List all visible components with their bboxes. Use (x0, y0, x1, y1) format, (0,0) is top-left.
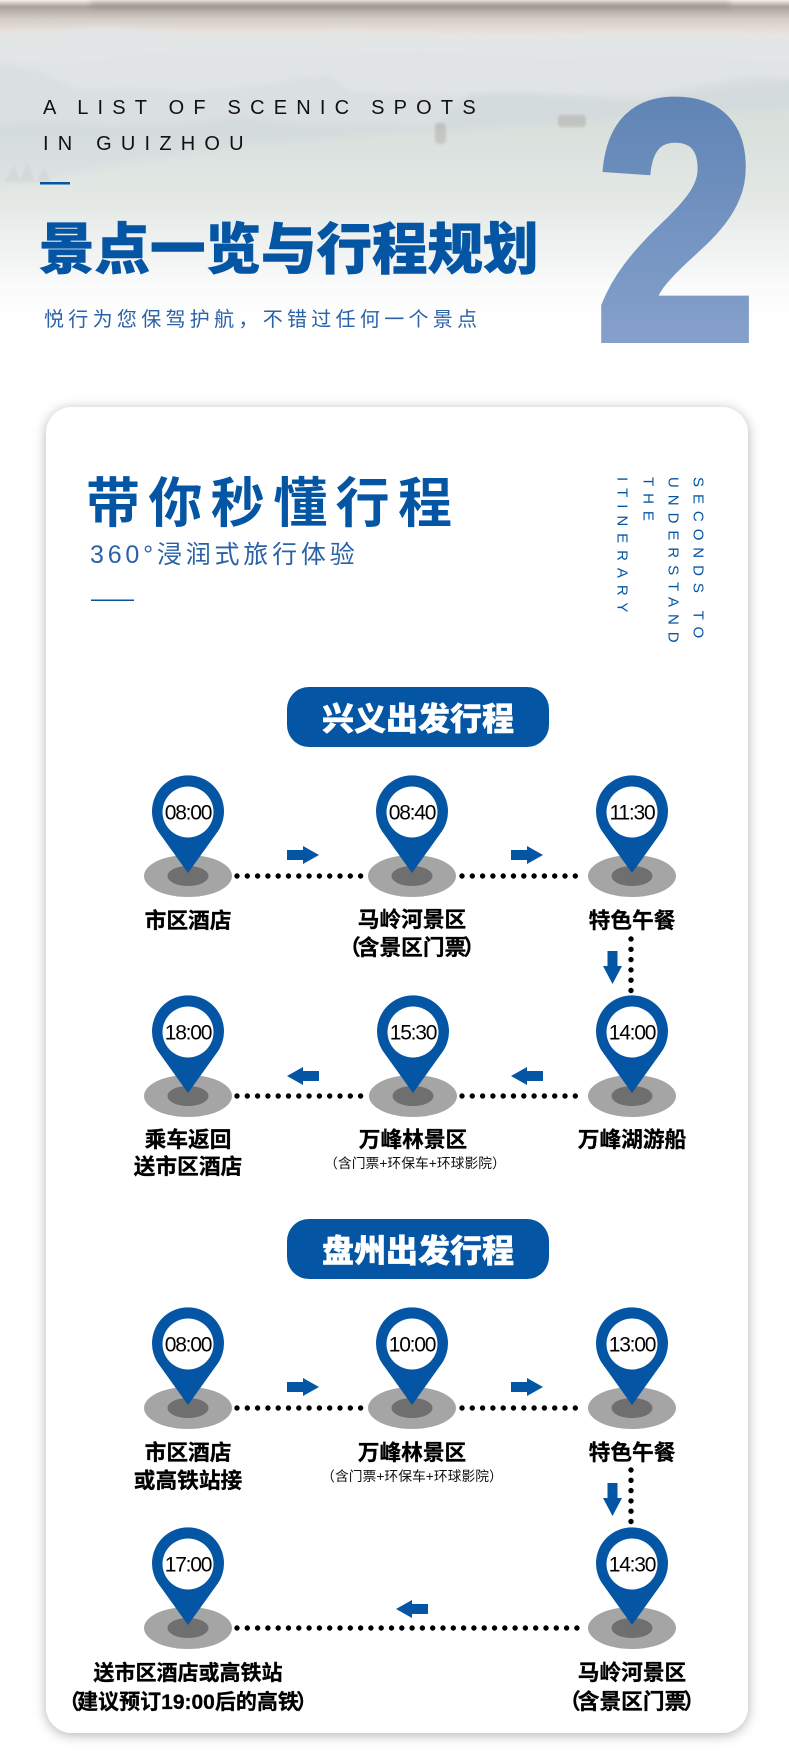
stop 17:00: 建议预订19:00后的高铁 (77, 1690, 299, 1714)
stop 13:00: 13:00 (609, 1334, 656, 1356)
arrow right (511, 846, 543, 864)
stop 08:00 (144, 775, 232, 933)
stop 10:00 (321, 1307, 503, 1484)
arrow down (603, 951, 622, 984)
route connector down (628, 1470, 634, 1522)
stop 14:30: （ (559, 1689, 581, 1714)
card accent line (91, 600, 134, 601)
arrow right (287, 846, 319, 864)
stop 11:30 (588, 775, 676, 933)
pill heading: xingyi route: 兴义出发行程 (322, 701, 514, 737)
stop 18:00: 送市区酒店 (134, 1154, 242, 1179)
route connector down (628, 939, 634, 992)
arrow right (511, 1378, 543, 1396)
route connector row 4 (237, 1625, 578, 1631)
arrow down (603, 1483, 622, 1516)
stop 17:00: 送市区酒店或高铁站 (94, 1661, 282, 1685)
stop 08:00: 08:00 (165, 1334, 212, 1356)
main title: 景点一览与行程规划 (39, 219, 539, 281)
stop 15:30 (324, 995, 506, 1171)
english heading: A LIST OF SCENIC SPOTS (43, 97, 485, 119)
stop 15:30: 万峰林景区 (359, 1127, 467, 1152)
stop 13:00 (588, 1307, 676, 1465)
stop 08:40 (339, 775, 485, 960)
stop 14:30: 马岭河景区 (578, 1660, 686, 1685)
vertical english caption: UNDERSTAND (664, 477, 682, 650)
pill heading: xingyi route (287, 687, 549, 747)
route connectors row 2 (237, 1093, 578, 1099)
stop 11:30: 特色午餐 (589, 908, 676, 933)
stop 13:00: 特色午餐 (589, 1440, 676, 1465)
background: misty mountain landscape (0, 0, 789, 345)
stop 10:00: （含门票+环保车+环球影院） (321, 1468, 503, 1484)
pill heading: panzhou route (287, 1219, 549, 1279)
stop 11:30: 11:30 (610, 802, 655, 824)
stop 15:30: （含门票+环保车+环球影院） (324, 1155, 506, 1171)
stop 08:00: 08:00 (165, 802, 212, 824)
stop 08:00 (134, 1307, 243, 1493)
english heading (43, 97, 485, 155)
vertical english caption: ITINERARY (614, 477, 630, 619)
vertical english caption: THE (640, 477, 656, 528)
arrow left (511, 1067, 543, 1085)
pill heading: panzhou route: 盘州出发行程 (322, 1233, 514, 1269)
stop 18:00: 乘车返回 (145, 1127, 231, 1152)
english heading: IN GUIZHOU (43, 133, 253, 155)
stop 08:40: ） (463, 935, 485, 960)
card subtitle: 360°浸润式旅行体验 (90, 541, 359, 569)
panel: itinerary card (46, 407, 748, 1733)
arrow left (287, 1067, 319, 1085)
stop 14:30: ） (683, 1689, 705, 1714)
stop 14:30: 14:30 (609, 1554, 656, 1576)
stop 17:00 (59, 1527, 317, 1714)
stop 18:00: 18:00 (165, 1022, 212, 1044)
stop 10:00: 万峰林景区 (358, 1440, 466, 1465)
stop 08:00: 市区酒店 (145, 908, 231, 933)
stop 18:00 (134, 995, 242, 1179)
stop 14:00 (578, 995, 687, 1152)
arrow left (396, 1600, 428, 1618)
stop 15:30: 15:30 (390, 1022, 437, 1044)
card title: 带你秒懂行程 (86, 474, 460, 534)
stop 14:00: 万峰湖游船 (578, 1127, 687, 1152)
stop 08:40: 含景区门票 (358, 935, 466, 960)
stop 08:40: （ (339, 935, 361, 960)
stop 08:00: 市区酒店 (145, 1440, 231, 1465)
arrow right (287, 1378, 319, 1396)
route connectors row 1 (237, 873, 578, 879)
vertical english caption (614, 477, 706, 650)
stop 14:30: 含景区门票 (578, 1689, 686, 1714)
stop 17:00: ） (296, 1691, 317, 1714)
stop 17:00: 17:00 (165, 1554, 212, 1576)
stop 08:40: 08:40 (389, 802, 436, 824)
subtitle: 悦行为您保驾护航，不错过任何一个景点 (44, 308, 481, 331)
stop 14:30 (559, 1527, 705, 1714)
stop 14:00: 14:00 (609, 1022, 656, 1044)
stop 08:00: 或高铁站接 (134, 1468, 243, 1493)
route connectors row 3 (237, 1405, 578, 1411)
stop 10:00: 10:00 (389, 1334, 436, 1356)
stop 17:00: （ (59, 1691, 80, 1714)
accent dash (40, 182, 70, 184)
vertical english caption: SECONDS TO (690, 477, 706, 645)
stop 08:40: 马岭河景区 (358, 907, 466, 932)
big numeral 2: 2 (595, 32, 757, 412)
